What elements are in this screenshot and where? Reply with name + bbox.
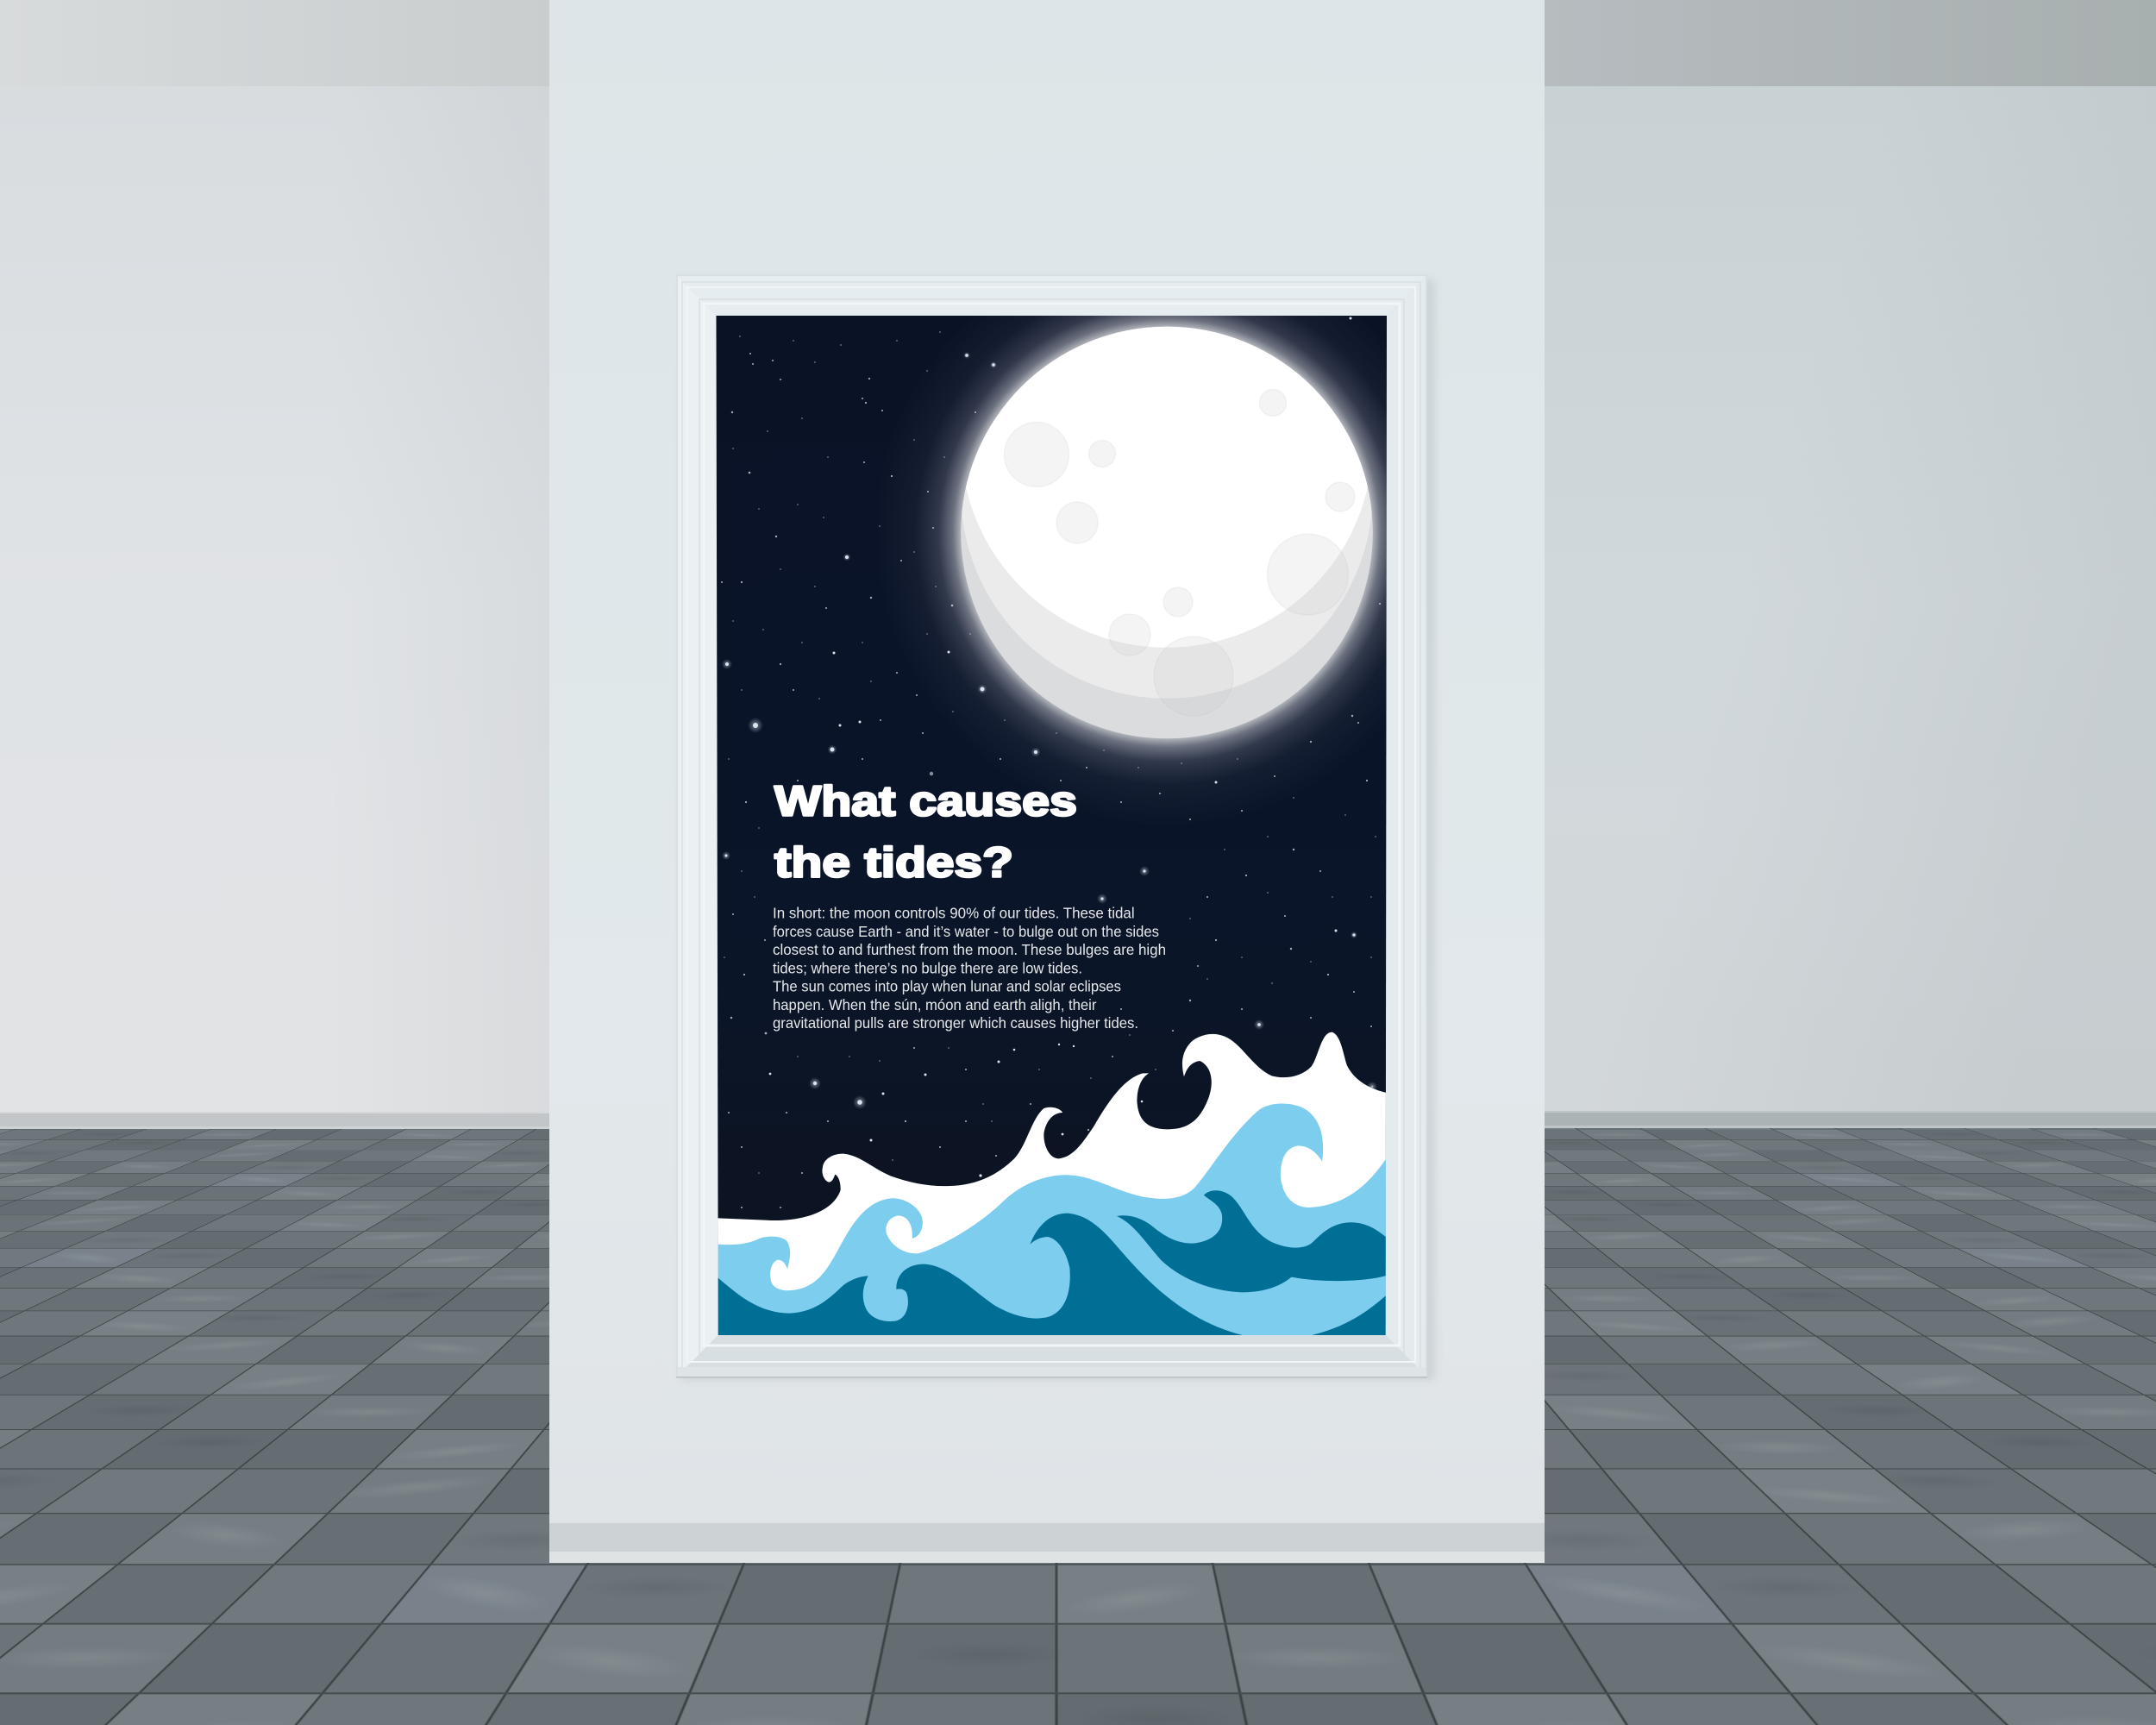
poster contents (718, 316, 1387, 1335)
poster: night sky background (716, 316, 1387, 1335)
body text: tides; where there’s no bulge there are low tides. (773, 959, 1082, 976)
body text: In short: the moon controls 90% of our tides. These tidal (773, 905, 1135, 922)
starfield (721, 317, 1381, 1226)
body text: happen. When the sún, móon and earth aligh, their (773, 996, 1097, 1013)
moon glow (906, 316, 1387, 794)
central pillar wall (549, 0, 1545, 1563)
title: What causes (774, 778, 1077, 825)
dark blue upper wave (1117, 1190, 1388, 1292)
body text: gravitational pulls are stronger which causes higher tides. (773, 1014, 1138, 1032)
left back wall (0, 0, 552, 1129)
title: the tides? (774, 840, 1013, 887)
dark blue lower right corner (1312, 1295, 1386, 1335)
body text: forces cause Earth - and it’s water - to bulge out on the sides (773, 923, 1159, 940)
body text: The sun comes into play when lunar and solar eclipses (773, 978, 1121, 995)
poster frame (676, 274, 1435, 1380)
moon craters (1004, 390, 1355, 716)
waves (715, 1032, 1388, 1337)
right back wall (1542, 0, 2156, 1128)
white wave layer (715, 1032, 1388, 1337)
dark blue lower left wave (715, 1214, 1252, 1337)
body text: closest to and furthest from the moon. These bulges are high (773, 941, 1166, 958)
moon (961, 326, 1373, 738)
title (773, 783, 1076, 878)
body text (773, 905, 1166, 1032)
light blue wave layer (715, 1104, 1388, 1337)
